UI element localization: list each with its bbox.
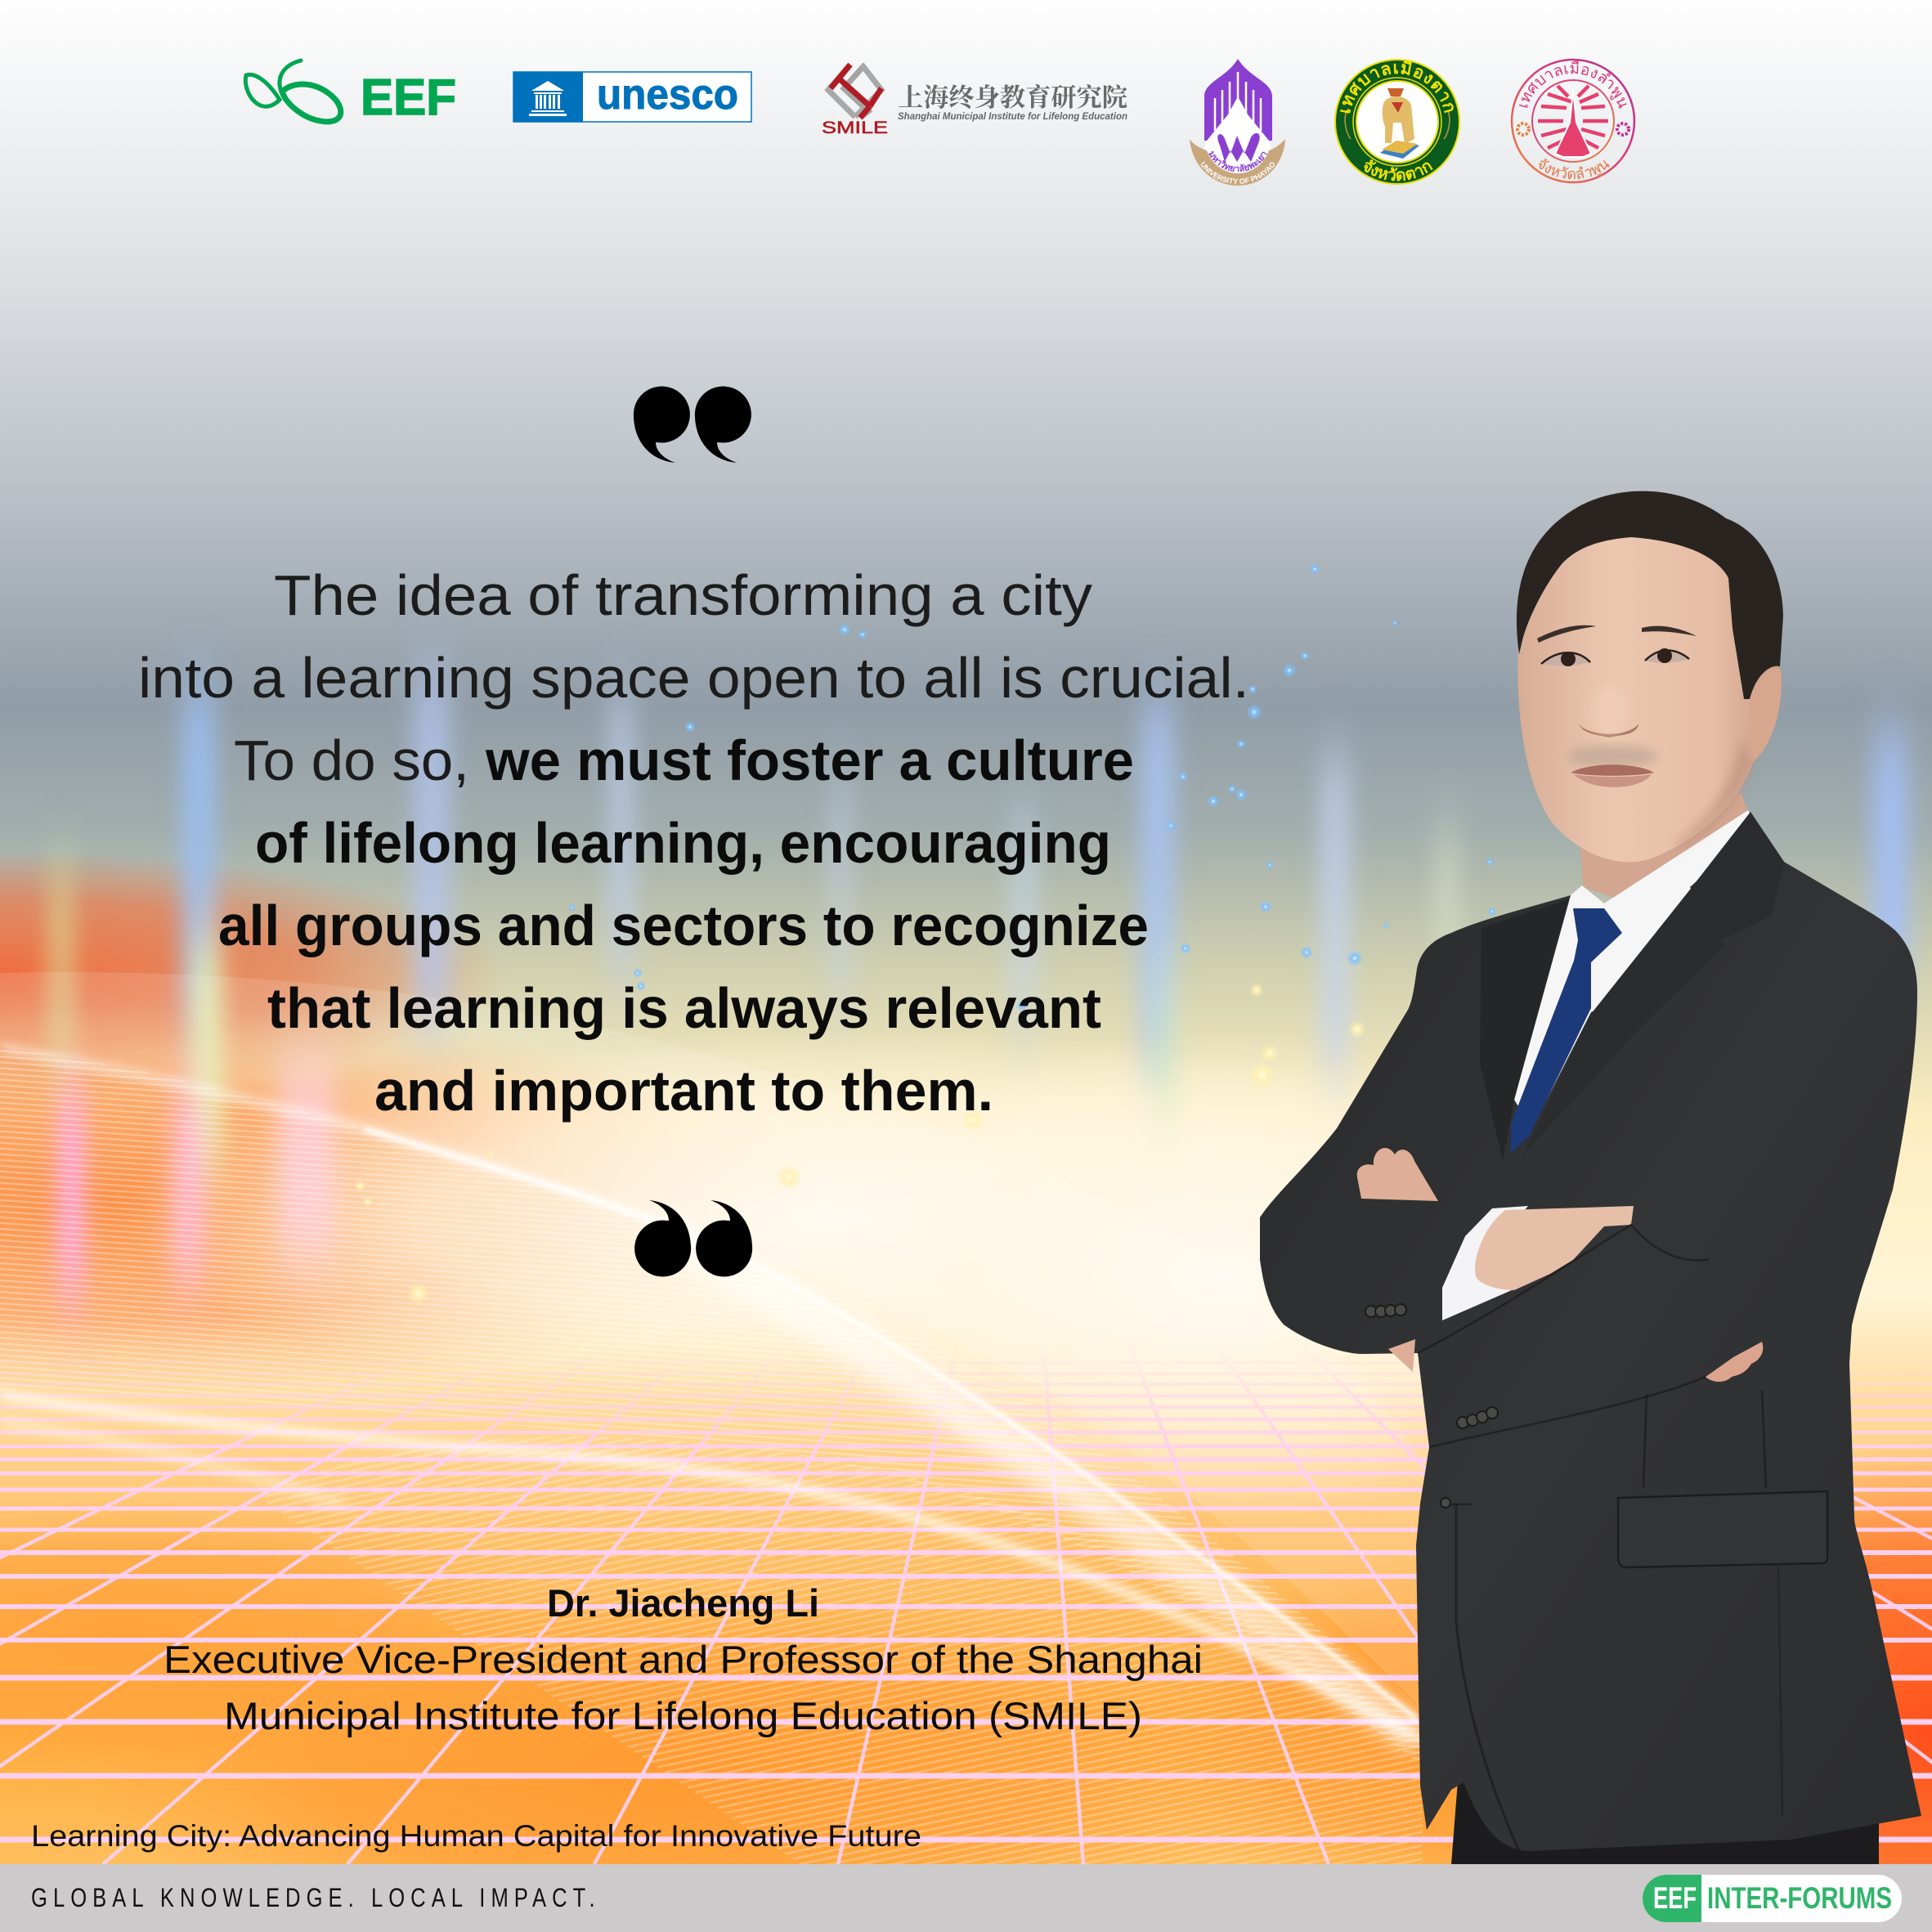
unesco wordmark: unesco <box>597 71 738 119</box>
right lapel <box>1521 812 1784 1161</box>
sparkles <box>354 563 1497 1305</box>
cuff <box>1442 1206 1528 1320</box>
logo: University of Phayao: UNIVERSITY OF PHAYAO <box>1200 162 1275 184</box>
speaker attribution: Executive Vice-President and Professor of the Shanghai <box>164 1638 1203 1681</box>
speaker attribution <box>164 1581 1203 1737</box>
logo: University of Phayao <box>1190 59 1285 186</box>
speaker attribution: Dr. Jiacheng Li <box>547 1581 819 1625</box>
icon: closing quotation mark <box>634 1200 752 1276</box>
quote text: that learning is always relevant <box>267 976 1101 1040</box>
nose <box>1578 724 1639 737</box>
left brow <box>1537 625 1596 643</box>
jaw shading <box>1676 736 1753 850</box>
tagline: GLOBAL KNOWLEDGE. LOCAL IMPACT. <box>31 1884 595 1913</box>
hair <box>1517 491 1783 699</box>
lips <box>1571 764 1654 787</box>
left lapel <box>1480 899 1568 1161</box>
shirt <box>1514 810 1758 1128</box>
quote text: all groups and sectors to recognize <box>218 894 1149 957</box>
logo: Lamphun municipality: เทศบาลเมืองลำพูน <box>1519 61 1627 109</box>
badge: EEF Inter-Forums: EEF <box>1653 1881 1697 1915</box>
quote text <box>138 563 1249 1123</box>
jacket body <box>1260 812 1921 1851</box>
logo: Lamphun municipality: จังหวัดลำพูน <box>1539 159 1609 179</box>
neck <box>1580 793 1750 899</box>
quote text: The idea of transforming a city <box>274 563 1092 627</box>
icon: SMILE knot <box>828 65 881 118</box>
sleeve folds and seams <box>1418 1225 1782 1851</box>
fingers right <box>1706 1342 1763 1382</box>
quote text: we must foster a culture <box>485 728 1134 792</box>
hand upper <box>1357 1148 1438 1201</box>
footer bar <box>0 1819 1932 1932</box>
vertical light bars <box>49 670 1908 1300</box>
bright swoosh strokes <box>0 1048 1423 1741</box>
event title: Learning City: Advancing Human Capital for Innovative Future <box>31 1819 921 1853</box>
logo: Tak municipality <box>1334 59 1460 185</box>
left eye <box>1541 652 1590 666</box>
right eye <box>1645 648 1689 663</box>
logo: SMILE: SMILE <box>822 119 888 137</box>
stubble <box>1567 745 1657 768</box>
pocket flap <box>1618 1491 1827 1567</box>
ear <box>1750 668 1782 762</box>
trousers <box>1451 1750 1879 1864</box>
perspective grid <box>0 1356 1932 1864</box>
icon: unesco temple <box>529 81 567 116</box>
head <box>1517 491 1783 862</box>
badge: EEF Inter-Forums <box>1643 1875 1902 1922</box>
tie <box>1511 908 1622 1153</box>
logo: SMILE: Shanghai Municipal Institute for Lifelong Education <box>898 110 1127 122</box>
portrait: Dr. Jiacheng Li <box>1260 491 1921 1864</box>
lower hand left <box>1388 1339 1415 1372</box>
forearm hand <box>1475 1206 1634 1290</box>
icon: elephant <box>1380 88 1419 159</box>
buttons <box>1365 1304 1498 1508</box>
logo: unesco <box>513 71 751 122</box>
logo: SMILE <box>822 65 1127 137</box>
quote text: and important to them. <box>374 1059 993 1123</box>
quote text: of lifelong learning, encouraging <box>255 811 1111 875</box>
logo: EEF <box>245 61 456 126</box>
logo: Tak municipality: เทศบาลเมืองตาก <box>1339 60 1454 113</box>
logo: Tak municipality: จังหวัดตาก <box>1364 159 1433 182</box>
quote text: into a learning space open to all is crucial. <box>138 646 1249 710</box>
right brow <box>1642 626 1697 636</box>
logo: Lamphun municipality <box>1511 59 1635 183</box>
speaker attribution: Municipal Institute for Lifelong Education (SMILE) <box>224 1694 1142 1737</box>
icon: opening quotation mark <box>634 387 751 463</box>
icon: stupa rays <box>1538 86 1608 148</box>
swoosh bands <box>0 1047 1423 1766</box>
quote text: To do so, <box>234 728 469 792</box>
logo: SMILE: 上海终身教育研究院 <box>898 77 1127 114</box>
EEF wordmark: EEF <box>361 69 456 126</box>
logo: University of Phayao: มหาวิทยาลัยพะเยา <box>1208 150 1267 172</box>
